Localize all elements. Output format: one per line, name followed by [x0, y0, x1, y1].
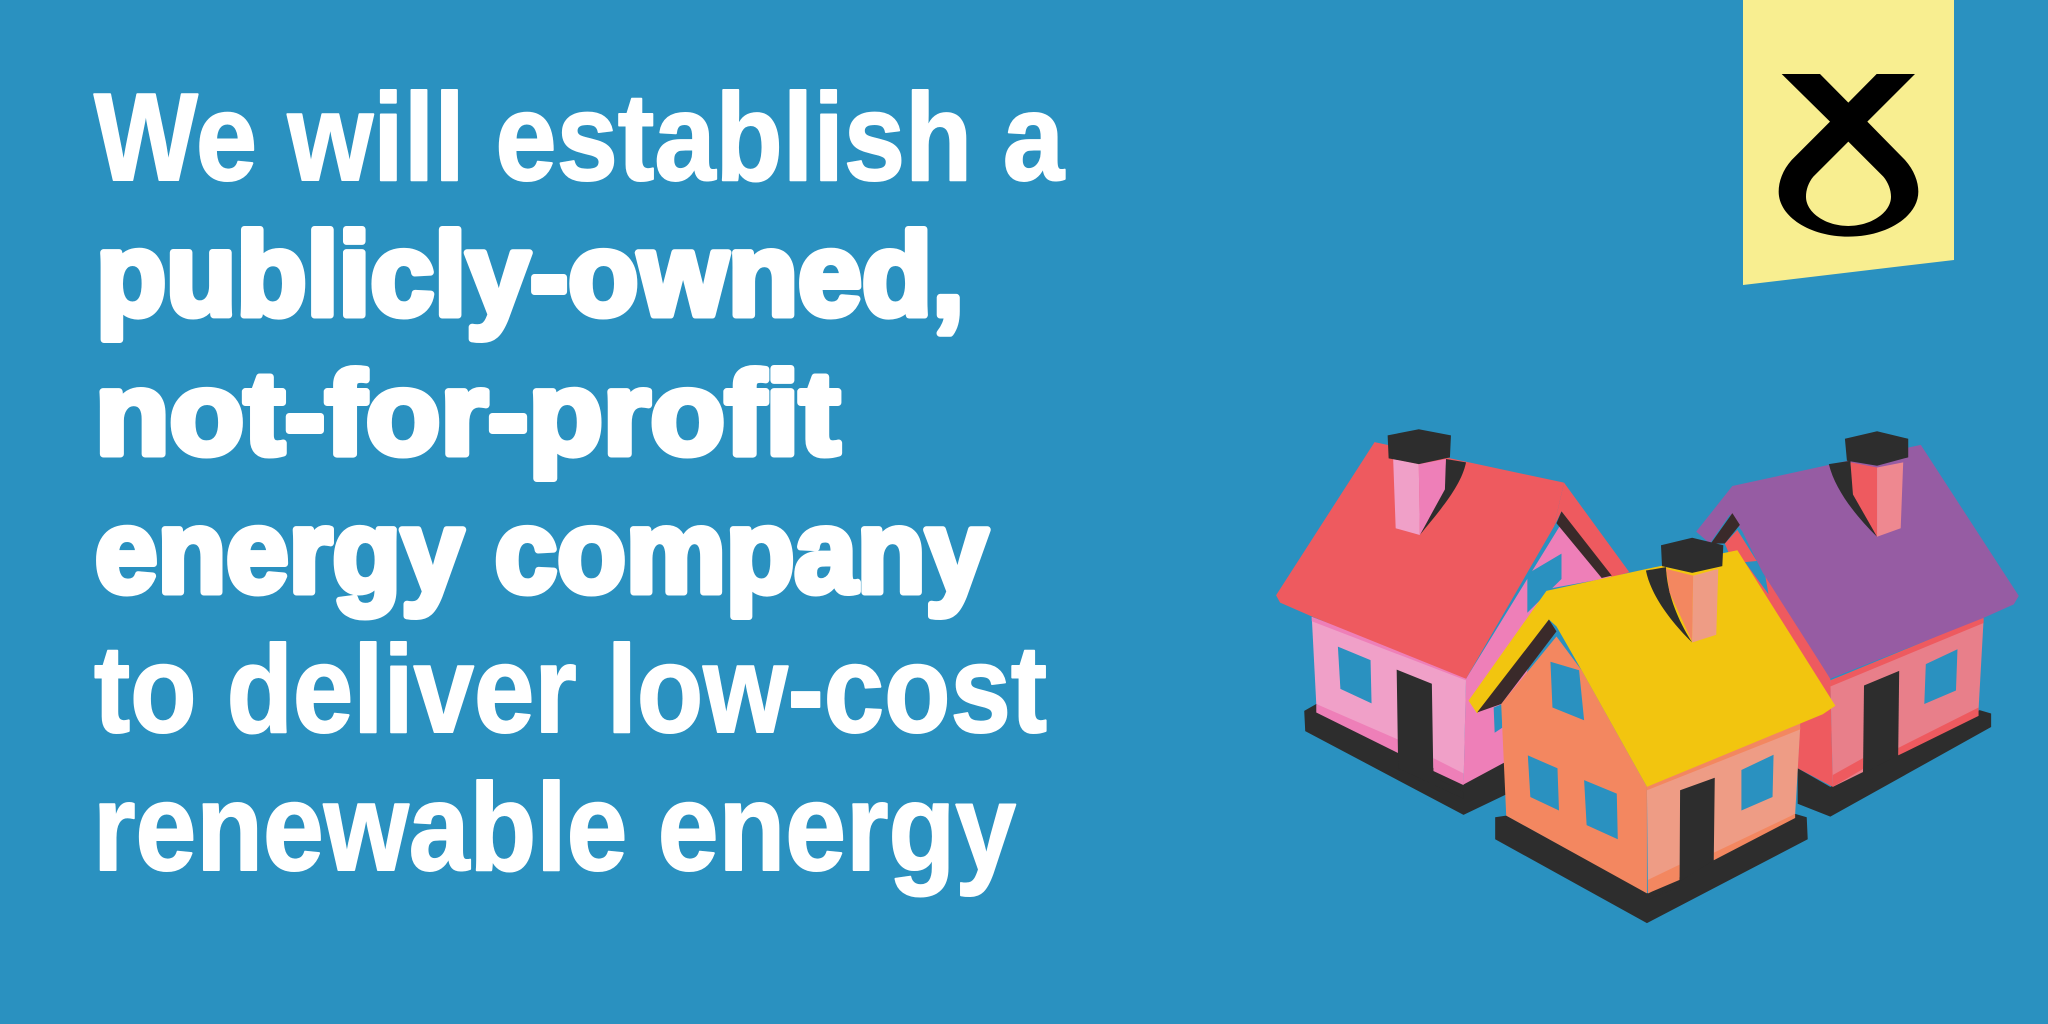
houses illustration — [1276, 429, 2019, 923]
headline line 4: emphasised: energy company — [95, 486, 988, 618]
headline line 5: to deliver low-cost — [94, 621, 1047, 759]
headline line 1: We will establish a — [94, 69, 1065, 207]
headline line 3: emphasised: not-for-profit — [95, 348, 840, 480]
yellow-roofed orange house — [1469, 538, 1835, 923]
red-roofed pink house — [1276, 429, 1629, 815]
logo banner with party symbol — [1743, 0, 1954, 285]
purple-roofed house — [1696, 431, 2019, 817]
headline text — [93, 69, 1065, 897]
yellow banner — [1743, 0, 1954, 285]
icon: loop saltire symbol — [1779, 74, 1918, 237]
headline line 6: renewable energy — [93, 759, 1016, 897]
headline line 2: emphasised: publicly-owned, — [96, 209, 964, 341]
